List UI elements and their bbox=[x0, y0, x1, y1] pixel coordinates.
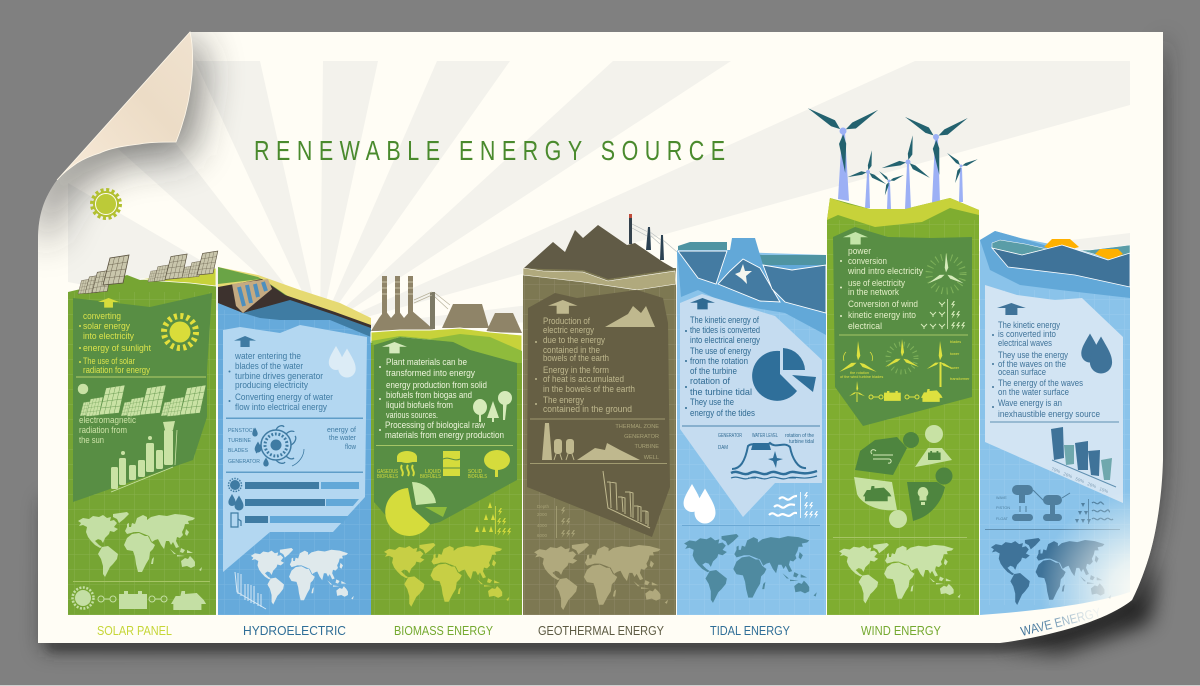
turbine labels: TURBINE bbox=[228, 438, 251, 444]
sun rays background bbox=[68, 61, 1130, 330]
solar world map bbox=[78, 512, 202, 577]
wave 3D bar chart: 70% bbox=[1051, 466, 1061, 474]
wave text: The energy of the waves bbox=[998, 378, 1083, 389]
turbine labels: BLADES bbox=[228, 448, 248, 454]
solar text: The use of solar bbox=[83, 356, 135, 367]
page curl fade bbox=[1044, 497, 1158, 630]
geothermal text: of heat is accumulated bbox=[543, 374, 624, 385]
biofuels icons: GASEOUS bbox=[377, 469, 399, 475]
wind dark info panel bbox=[833, 227, 972, 426]
hills bbox=[442, 304, 489, 328]
solar bar chart bbox=[111, 421, 177, 492]
biomass world map bbox=[384, 543, 509, 607]
biomass text: biofuels from biogas and bbox=[386, 390, 472, 401]
waves and bolts bbox=[769, 492, 818, 519]
biofuels icons: LIQUID bbox=[425, 469, 441, 475]
geothermal text: The energy bbox=[543, 395, 584, 406]
curl shadow on page bbox=[38, 32, 205, 240]
hydro text: blades of the water bbox=[235, 361, 303, 372]
wind text: wind intro electricity bbox=[847, 266, 923, 277]
hydro world map bbox=[251, 548, 354, 605]
yellow turbines row: of the wind turbine blades bbox=[840, 375, 883, 379]
icon: trees bbox=[473, 391, 512, 422]
tidal text: the turbine tidal bbox=[690, 387, 752, 398]
biofuels icons: BIOFUELS bbox=[420, 474, 442, 480]
hydro text bbox=[228, 351, 333, 413]
tidal light panel bbox=[680, 294, 822, 517]
solar dark info panel bbox=[73, 293, 212, 502]
wind text: kinetic energy into bbox=[848, 310, 916, 321]
wave light panel bbox=[985, 285, 1123, 503]
yellow hill bbox=[218, 267, 371, 328]
geothermal dark info panel bbox=[527, 290, 670, 537]
icon: mountains bbox=[605, 306, 655, 327]
column labels: HYDROELECTRIC bbox=[243, 623, 346, 638]
arrow bbox=[690, 298, 715, 309]
yellow ground band bbox=[371, 328, 522, 352]
yellow turbines row bbox=[838, 339, 970, 387]
wind text: power bbox=[848, 246, 871, 257]
wave plants and waves bbox=[1075, 499, 1113, 524]
tidal diagram labels: DAM bbox=[718, 445, 728, 451]
wind text bbox=[840, 246, 923, 332]
biomass text: transformed into energy bbox=[386, 368, 475, 379]
tidal text: of the turbine bbox=[690, 366, 737, 377]
column labels: TIDAL ENERGY bbox=[710, 623, 790, 638]
tidal text: rotation of bbox=[690, 376, 730, 387]
tidal text bbox=[685, 315, 760, 419]
wave 3D bar chart: 15% bbox=[1099, 486, 1109, 494]
wind text: electrical bbox=[848, 321, 882, 332]
tidal pie chart bbox=[752, 348, 816, 401]
tidal barrage dark water bbox=[678, 251, 826, 313]
hydro comparison bars bbox=[228, 478, 359, 527]
depth scale and bolts: Depth bbox=[537, 504, 550, 509]
wind text: Conversion of wind bbox=[848, 299, 918, 310]
geothermal labels bbox=[615, 424, 659, 461]
tan soil band bbox=[523, 268, 676, 290]
energy of the water flow: the water bbox=[329, 433, 356, 442]
solar paragraph: radiation from bbox=[79, 425, 127, 436]
geothermal column background bbox=[523, 268, 676, 615]
tidal diagram labels bbox=[718, 433, 814, 451]
wind text: use of electricity bbox=[848, 278, 905, 289]
yellow grass band bbox=[827, 198, 979, 227]
hydro text: Converting energy of water bbox=[235, 392, 333, 403]
solar paragraph: electromagnetic bbox=[79, 415, 136, 426]
teal sea bbox=[992, 240, 1130, 258]
geothermal text: contained in the bbox=[543, 345, 600, 356]
wave 3D bar chart bbox=[1051, 427, 1116, 494]
solar paragraph bbox=[79, 415, 136, 446]
power towers bbox=[629, 214, 677, 260]
icon: small sun bbox=[92, 190, 120, 218]
teal water bbox=[678, 242, 826, 265]
wind column background bbox=[827, 198, 979, 615]
yellow turbines row: the rotation bbox=[850, 371, 869, 375]
power plant bbox=[371, 276, 522, 333]
depth scale and bolts: 6000 bbox=[537, 533, 548, 538]
hydro text: producing electricity bbox=[235, 380, 308, 391]
biomass text: Plant materials can be bbox=[386, 357, 467, 368]
biomass text: Processing of biological raw bbox=[385, 420, 485, 431]
wave text: The kinetic energy bbox=[998, 320, 1060, 331]
icon: light turbine bbox=[927, 253, 964, 291]
wave text: on the water surface bbox=[998, 387, 1069, 398]
wave text: They use the energy bbox=[998, 350, 1068, 361]
tidal text: The kinetic energy of bbox=[690, 315, 759, 326]
geothermal text: contained in the ground bbox=[543, 404, 632, 415]
turbine labels: PENSTOCK bbox=[228, 428, 256, 434]
biomass dark info panel bbox=[374, 337, 517, 532]
depth scale and bolts bbox=[537, 504, 575, 538]
geothermal outline bars bbox=[603, 471, 650, 528]
wave text: ocean surface bbox=[998, 367, 1046, 378]
geothermal plant icon bbox=[542, 423, 640, 460]
tidal text: They use the bbox=[690, 397, 734, 408]
wave column background bbox=[980, 231, 1130, 615]
arrow bbox=[382, 342, 407, 353]
page title: RENEWABLE ENERGY SOURCE bbox=[254, 137, 725, 167]
tidal text: The use of energy bbox=[690, 346, 751, 357]
geothermal world map bbox=[534, 543, 668, 610]
solar to home flow bbox=[72, 588, 206, 610]
panel: solar panel bbox=[68, 251, 218, 615]
tidal turbine star icon bbox=[735, 264, 752, 284]
tidal diagram labels: GENERATOR bbox=[718, 433, 742, 439]
wave world map bbox=[991, 538, 1111, 605]
arrow bbox=[843, 232, 868, 244]
panel: tidal energy bbox=[677, 238, 826, 615]
green hill bbox=[218, 267, 292, 299]
wind to home flow bbox=[849, 381, 943, 402]
second orange shape bbox=[1095, 249, 1123, 260]
hydro dam bbox=[232, 279, 272, 313]
solar text: radiation for energy bbox=[83, 365, 150, 376]
dark sea bbox=[992, 245, 1130, 287]
dam embankment bbox=[218, 279, 371, 330]
tidal barrage diagram bbox=[731, 443, 817, 479]
hydro text: flow into electrical energy bbox=[235, 402, 327, 413]
column labels bbox=[97, 604, 1103, 639]
icon: dark drops bbox=[1081, 334, 1112, 374]
geothermal labels: GENERATOR bbox=[624, 434, 659, 440]
solar text: energy of sunlight bbox=[83, 343, 151, 354]
icon: water drops bbox=[329, 346, 356, 378]
wave 3D bar chart: 26% bbox=[1087, 481, 1097, 489]
biomass text: materials from energy production bbox=[385, 430, 504, 441]
geothermal text: bowels of the earth bbox=[543, 353, 609, 364]
wave text bbox=[992, 320, 1100, 420]
hydro column background bbox=[218, 300, 371, 615]
biofuels icons: SOLID bbox=[468, 469, 482, 475]
biomass text: energy production from solid bbox=[386, 380, 487, 391]
energy of the water flow: flow bbox=[345, 442, 356, 451]
turbine labels bbox=[228, 428, 260, 465]
solar text: into electricity bbox=[83, 331, 134, 342]
tidal column background bbox=[677, 250, 826, 615]
solar text: solar energy bbox=[83, 321, 130, 332]
wave text: inexhaustible energy source bbox=[998, 409, 1100, 420]
tidal mid-blue water bbox=[677, 238, 826, 335]
tidal text: energy of the tides bbox=[690, 408, 755, 419]
folded corner bbox=[57, 32, 193, 180]
geothermal labels: THERMAL ZONE bbox=[615, 424, 659, 430]
arrow bbox=[548, 300, 578, 314]
yellow turbines row: transformer bbox=[950, 377, 970, 381]
biomass text bbox=[379, 357, 504, 441]
panel: hydroelectric bbox=[218, 267, 371, 615]
biofuels icons: BIOFUELS bbox=[468, 474, 488, 480]
geothermal text: due to the energy bbox=[543, 335, 605, 346]
yellow turbines row: lower bbox=[950, 366, 960, 370]
wind text: in the network bbox=[848, 287, 899, 298]
tidal diagram labels: rotation of the bbox=[785, 433, 814, 439]
yellow turbines row: tower bbox=[950, 352, 960, 356]
icon: sun bbox=[164, 316, 196, 348]
panel: geothermal energy bbox=[523, 214, 677, 615]
solar module row bbox=[78, 384, 206, 416]
rooftop solar panels bbox=[78, 251, 218, 294]
tidal text: the tides is converted bbox=[690, 325, 760, 336]
hydro text: water entering the bbox=[234, 351, 301, 362]
solar paragraph: the sun bbox=[79, 435, 104, 446]
wave 3D bar chart: 50% bbox=[1075, 476, 1085, 484]
wave device icons: WAVE bbox=[996, 496, 1007, 500]
tidal diagram labels: WATER LEVEL bbox=[752, 433, 778, 439]
wave device icons: FLOAT bbox=[996, 517, 1009, 521]
biomass pie chart bbox=[385, 482, 447, 536]
energy of the water flow bbox=[327, 425, 357, 451]
hydro outline bar chart bbox=[235, 572, 266, 609]
energy of the water flow: energy of bbox=[327, 425, 357, 434]
biofuels icons: BIOFUELS bbox=[377, 474, 399, 480]
biofuels icons bbox=[377, 450, 510, 480]
panel: biomass energy bbox=[371, 276, 522, 615]
geothermal text bbox=[535, 316, 635, 415]
depth scale and bolts: 4000 bbox=[537, 523, 548, 528]
mountains bbox=[524, 225, 675, 279]
geothermal text: electric energy bbox=[543, 325, 594, 336]
biomass text: liquid biofuels from bbox=[386, 400, 453, 411]
hydro text: turbine drives generator bbox=[235, 371, 323, 382]
tidal diagram labels: turbine tidal bbox=[789, 439, 814, 445]
sun orange shape bbox=[1044, 239, 1079, 252]
wind circular chart bbox=[854, 425, 952, 528]
wave text: Wave energy is an bbox=[998, 398, 1062, 409]
depth scale and bolts: 2000 bbox=[537, 512, 548, 517]
geothermal labels: WELL bbox=[644, 455, 659, 461]
column labels: SOLAR PANEL bbox=[97, 623, 172, 638]
small wind and bolts bbox=[921, 299, 965, 330]
wave text: of the waves on the bbox=[998, 359, 1066, 370]
arrow bbox=[997, 303, 1026, 315]
biomass column background bbox=[371, 332, 522, 615]
icon: white drops bbox=[684, 484, 716, 524]
wind turbines on top bbox=[806, 104, 978, 209]
turbine labels: GENERATOR bbox=[228, 459, 260, 465]
wind text: conversion bbox=[848, 256, 887, 267]
solar column background bbox=[68, 275, 216, 615]
wave device icons: PISTON bbox=[996, 506, 1010, 510]
wave 3D bar chart: 26% bbox=[1063, 471, 1073, 479]
geothermal text: in the bowels of the earth bbox=[543, 384, 635, 395]
plants and bolts bbox=[475, 502, 511, 536]
panel: wave energy bbox=[980, 231, 1130, 615]
arrow bbox=[98, 298, 119, 308]
wave device icons bbox=[996, 485, 1070, 521]
arrow bbox=[234, 336, 256, 347]
hydro light panel bbox=[223, 325, 367, 572]
solar text: converting bbox=[83, 311, 121, 322]
geothermal text: Energy in the form bbox=[543, 365, 609, 376]
geothermal text: Production of bbox=[543, 316, 590, 327]
column labels: GEOTHERMAL ENERGY bbox=[538, 623, 664, 638]
geothermal labels: TURBINE bbox=[634, 444, 659, 450]
wave text: is converted into bbox=[998, 329, 1056, 340]
column labels: BIOMASS ENERGY bbox=[394, 623, 493, 638]
column labels: WAVE ENERGY bbox=[1019, 604, 1103, 639]
wind world map bbox=[839, 543, 960, 603]
panel: wind energy bbox=[806, 104, 979, 615]
solar text bbox=[79, 311, 151, 376]
tidal world map bbox=[684, 534, 817, 603]
tidal text: into electrical energy bbox=[690, 335, 760, 346]
yellow turbines row: blades bbox=[950, 340, 961, 344]
wave text: electrical waves bbox=[998, 338, 1052, 349]
biomass text: various sources. bbox=[386, 410, 438, 421]
tidal text: from the rotation bbox=[690, 356, 748, 367]
column labels: WIND ENERGY bbox=[861, 623, 941, 638]
icon: water turbine bbox=[252, 426, 296, 466]
